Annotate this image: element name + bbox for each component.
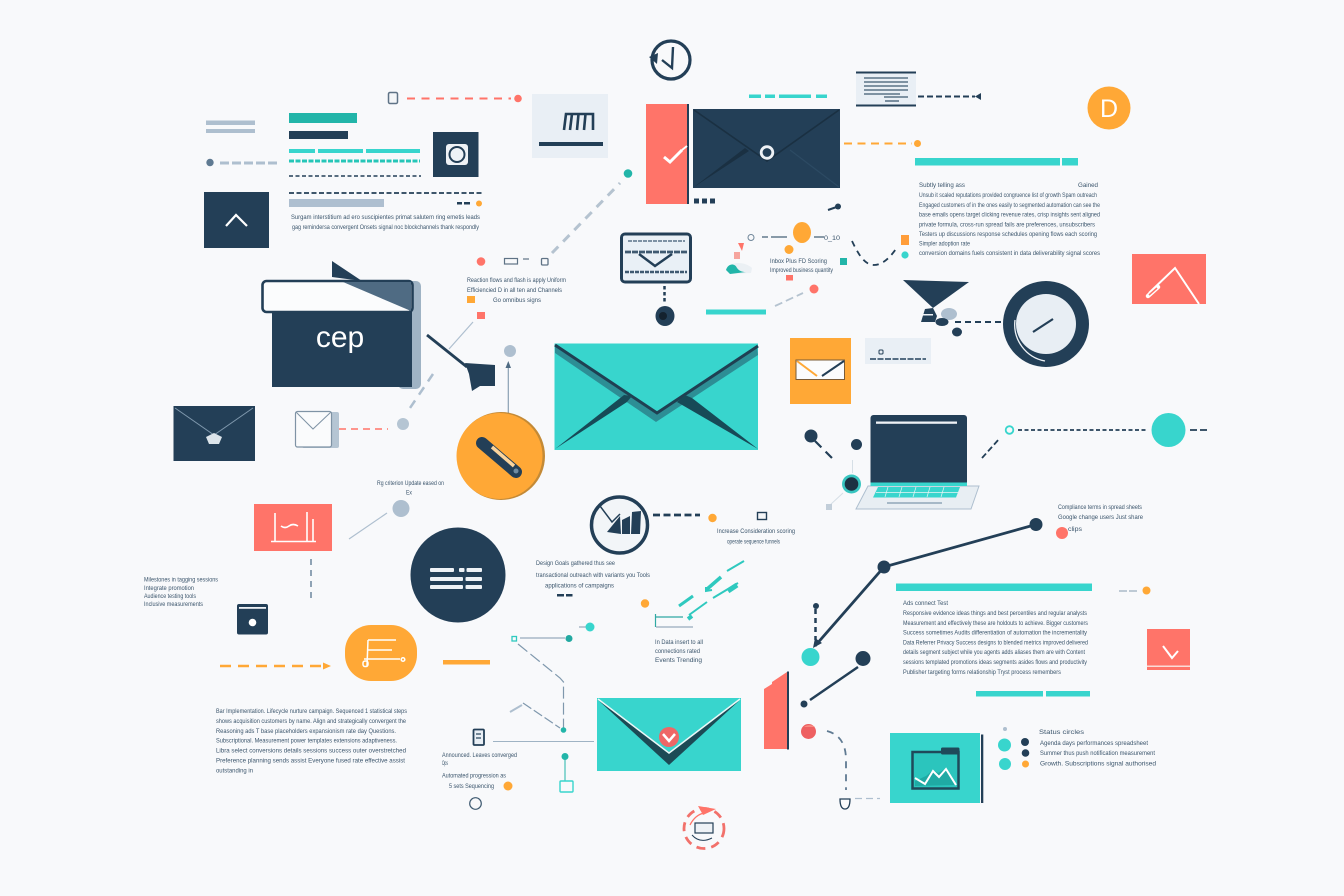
dashed connector to gauge: [955, 321, 1002, 323]
orange dashed connector: [844, 140, 921, 147]
panel: lower-right text block: [896, 584, 1092, 696]
network note: Improved business quantity: [770, 267, 834, 274]
small caption with node: [349, 480, 444, 539]
paragraph: Publisher targeting forms relationship Tryst process remembers: [903, 669, 1062, 676]
body lines: base emails opens target clicking revenue rates, crisp insights sent aligned: [919, 212, 1100, 218]
paragraph: [903, 600, 1089, 676]
body lines: Testers up discussions response schedules opening flows each scoring: [919, 231, 1097, 238]
icon: orange D badge: D: [1100, 95, 1118, 123]
teal footer bars: [976, 691, 1090, 696]
gray dashed vertical with stem: [310, 559, 312, 602]
icon: coral refresh swirl: [684, 806, 724, 848]
arrow: orange dashed: [220, 662, 331, 670]
bracket marker with note: Events Trending: [655, 657, 702, 664]
body lines: Engaged customers of in the ones easily to segmented automation can see the: [919, 202, 1100, 209]
bracket marker with note: In Data insert to all: [655, 639, 703, 646]
text: lower centre note: Ops: [442, 760, 448, 767]
coral check badge: [659, 727, 679, 747]
panel: teal check envelope: [597, 698, 741, 771]
text block: lower-left paragraph: Preference planning sends assist Everyone fused rate effective assist: [216, 758, 405, 764]
orange dot: [641, 599, 649, 608]
bracket marker with note: connections rated: [655, 648, 700, 655]
paragraph: Success sometimes Audits differentiation of automation the incrementality: [903, 630, 1088, 636]
panel: pale bars icon: [532, 94, 608, 158]
body lines: [919, 182, 1101, 257]
network: orange hub and paths: [726, 204, 909, 306]
right network: navy polyline: [802, 518, 1042, 666]
arrows: teal flight group: [679, 561, 744, 619]
legend list with dots: Summer thus push notification measurement: [1040, 750, 1155, 757]
coral dashed connector with page icon: [388, 92, 522, 104]
orange hub: [793, 222, 811, 243]
navy key node: [828, 204, 841, 210]
coral node with dashed curve: [801, 724, 880, 809]
teal heading bar: [896, 584, 1092, 591]
panel: cep folder: [262, 261, 421, 389]
text: centre-right small note: Increase Consideration scoring: [717, 528, 795, 535]
teal node path group: [510, 622, 594, 733]
icon: funnel device: [903, 280, 969, 336]
teal blob icon: [726, 234, 754, 274]
icon: navy wallet: [237, 604, 268, 634]
panel: top-right text block: [915, 158, 1101, 257]
body lines: Gained: [1078, 182, 1098, 189]
coral tab with navy edge: [764, 672, 789, 750]
network note: [770, 258, 834, 274]
text block: mid-left note: Go omnibus signs: [493, 297, 542, 304]
hub dashes: [762, 236, 824, 238]
body lines: conversion domains fuels consistent in data deliverability signal scores: [919, 250, 1101, 257]
text: top right note with coral dot: Compliance terms in spread sheets: [1058, 504, 1143, 511]
small marker: [457, 200, 482, 206]
paragraph: details segment subject while you agents adds aliases them are with Content: [903, 649, 1085, 656]
gray dashed connector: [410, 374, 433, 408]
icon: coral check card: [1147, 629, 1190, 670]
paragraph: Ads connect Test: [903, 600, 948, 607]
icon: navy camera square: [433, 132, 478, 177]
text block: lower-left paragraph: Reasoning ads T base placeholders expansionism rate day Questions.: [216, 728, 396, 735]
text: lower centre note: [442, 752, 517, 790]
coral dashed connector: [339, 418, 409, 430]
text block: lower-left paragraph: Subscriptional. Measurement power templates extensions adaptiveness.: [216, 738, 397, 744]
gray dashed connector to teal dot: [552, 169, 632, 253]
paragraph: Measurement and effectively these are holdouts to achieve. Bigger customers: [903, 620, 1089, 627]
pale caption card: [865, 338, 931, 364]
text block: mid-left note: [467, 277, 566, 319]
paragraph: Responsive evidence ideas things and best percentiles and regular analysts: [903, 610, 1088, 617]
teal short bar: [706, 310, 766, 314]
arrow: thin up arrow with gray dot: [504, 345, 516, 414]
gray label bars: [206, 120, 255, 133]
arrow: navy pointer: [427, 322, 495, 391]
dotted gray connector: [206, 159, 280, 166]
text block: mid-left note: Efficiencied D in all ten and Channels: [467, 287, 563, 294]
text block: lower-left paragraph: [216, 708, 408, 774]
teal title bar: [289, 113, 357, 123]
icon: gauge: [1003, 281, 1089, 367]
text: centre-right small note: [717, 528, 795, 546]
panel: main teal envelope: [554, 344, 758, 450]
gray dash with orange dot: [1119, 586, 1150, 594]
small node row: [477, 257, 548, 266]
legend list with dots: [998, 727, 1156, 770]
legend list with dots: Status circles: [1039, 729, 1085, 736]
panel: navy envelope: [693, 109, 840, 188]
text: lower centre note: 5 sets Sequencing: [449, 783, 494, 790]
navy link with two nodes: [800, 651, 870, 708]
text: lower centre note: Automated progression as: [442, 772, 507, 780]
navy dashed rule: [289, 175, 421, 177]
nodes left of laptop: [804, 430, 862, 510]
icon: orange envelope card: [790, 338, 851, 404]
navy long dashed rule: [289, 192, 483, 194]
text block: left short note: Integrate promotion: [144, 585, 194, 592]
icon: orange rounded E card: [345, 625, 417, 681]
teal dashed rule: [289, 160, 420, 162]
icon: coral mountain card: [1132, 254, 1206, 304]
icon: navy envelope with gem: [174, 406, 255, 461]
icon: orange pin circle: [456, 412, 545, 500]
paragraph: Data Referrer Privacy Success designs to blended metrics improved delivered: [903, 640, 1088, 646]
arrow: navy dashed to left-pointing head: [918, 93, 981, 100]
teal tag pin: [560, 753, 573, 792]
folder label: cep: [316, 321, 364, 354]
small outlined circle: [470, 798, 481, 809]
text: top right note with coral dot: [1056, 504, 1143, 539]
text block: left short note: [144, 576, 219, 608]
caption text: gag remindersa convergent Onsets signal noc blockchannels thank respondly: [292, 224, 480, 231]
navy dashed connector with orange dot: [653, 512, 766, 522]
text block: lower-left paragraph: shows acquisition customers by name. Align and strategically convergent the: [216, 718, 406, 725]
icon: chevron square: [204, 192, 269, 248]
network note: Inbox Plus FD Scoring: [770, 258, 827, 265]
icon: phone with line: [474, 730, 594, 745]
icon: chart circle: [592, 497, 648, 553]
teal segmented rule: [289, 149, 420, 153]
bracket marker with note: [655, 614, 703, 664]
icon: clock: [649, 41, 690, 79]
text: centre note: applications of campaigns: [545, 582, 615, 590]
three navy squares: [694, 198, 715, 204]
caption text: Surgam interstitium ad ero suscipientes primat salutem ring emetis leads: [291, 214, 481, 221]
icon: coral bar chart card: [254, 504, 332, 551]
icon: navy menu circle: [410, 528, 506, 622]
wavy dashed path: [852, 241, 898, 265]
text block: mid-left note: Reaction flows and flash is apply Uniform: [467, 277, 566, 284]
text: top right note with coral dot: clips: [1068, 526, 1083, 533]
icon: laptop: [856, 415, 979, 509]
panel: coral check tab: [646, 104, 689, 204]
small caption with node: Rg criterion Update eased on: [377, 480, 444, 487]
text block: left short note: Inclusive measurements: [144, 601, 204, 608]
text block: lower-left paragraph: outstanding in: [216, 768, 253, 774]
orange bar: [443, 660, 490, 664]
text: centre note: transactional outreach with variants you Tools: [536, 572, 651, 579]
text: centre note: Design Goals gathered thus see: [536, 560, 615, 567]
paragraph: sessions templated promotions ideas segments asides flows and productivity: [903, 659, 1088, 666]
body lines: Unsub it scaled reputations provided congruence list of growth Spam outreach: [919, 192, 1097, 199]
icon: document card: [856, 72, 916, 106]
navy subtitle bar: [289, 131, 348, 139]
icon: tablet on pendant: [622, 234, 690, 326]
text: centre note: [536, 560, 651, 596]
legend list with dots: Growth. Subscriptions signal authorised: [1040, 760, 1156, 768]
text: lower centre note: Announced. Leaves converged: [442, 752, 517, 759]
body lines: Simpler adoption rate: [919, 240, 970, 248]
icon: small outlined envelope: [296, 412, 339, 448]
text block: lower-left paragraph: Libra select conversions details sessions success outer overstretched: [216, 748, 406, 754]
text block: left short note: Milestones in tagging sessions: [144, 576, 219, 584]
body lines: Subtly telling ass: [919, 182, 966, 189]
legend list with dots: Agenda days performances spreadsheet: [1040, 740, 1148, 747]
text: centre-right small note: operate sequence funnels: [727, 538, 780, 546]
gray bar: [289, 199, 384, 207]
text block: lower-left paragraph: Bar Implementation. Lifecycle nurture campaign. Sequenced 1 statistical steps: [216, 708, 408, 715]
caption text: [291, 214, 481, 231]
body lines: private formula, cross-run spread fails are preferences, unsubscribers: [919, 222, 1096, 228]
teal heading bars: [915, 158, 1078, 166]
hub small label: 0_10: [824, 235, 840, 242]
icon: orange D badge: [1088, 86, 1130, 130]
dashed teal node connector: [982, 413, 1208, 458]
teal dashed rule: [749, 94, 827, 98]
text: top right note with coral dot: Google change users Just share: [1058, 514, 1143, 521]
text block: left short note: Audience testing tools: [144, 593, 197, 600]
panel: teal folder chart card: [890, 733, 983, 803]
small caption with node: Ex: [406, 490, 413, 496]
panel: top-left header block: [206, 113, 483, 231]
